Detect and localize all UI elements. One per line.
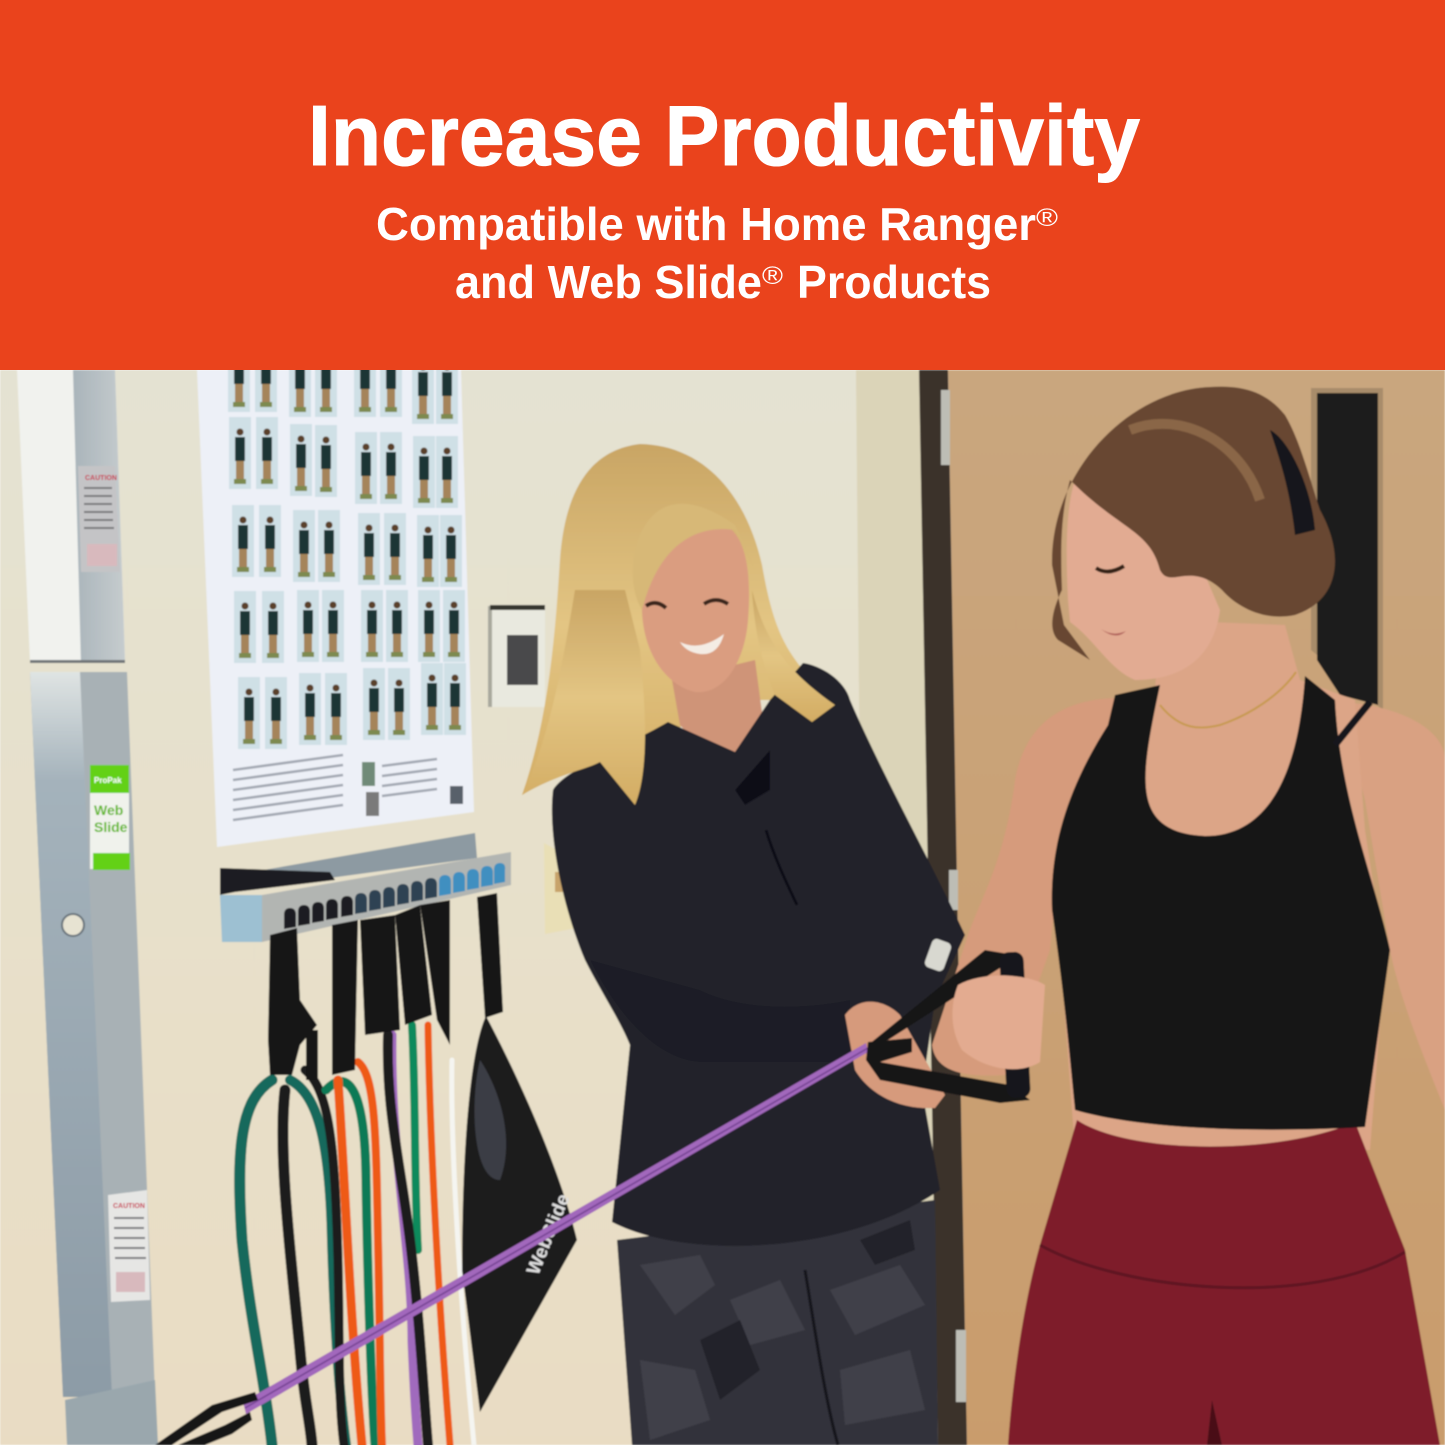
door frame <box>919 370 967 1445</box>
necklace <box>1160 672 1296 728</box>
door <box>948 370 1445 1445</box>
hanging resistance tubes <box>240 1025 474 1445</box>
Web Slide label: Slide <box>94 819 128 835</box>
neck <box>672 660 763 753</box>
caution label: CAUTION <box>85 475 117 482</box>
client <box>932 387 1445 1445</box>
subtitle: Compatible with Home Ranger <box>376 198 1036 250</box>
storage bag: WebSlide <box>523 1191 575 1278</box>
left arm and shoulder <box>932 698 1115 1076</box>
hair clip <box>1270 430 1315 535</box>
title: Increase Productivity <box>308 89 1140 184</box>
thermostat <box>488 605 545 707</box>
right arm <box>1356 704 1445 1108</box>
subtitle: Products <box>797 256 991 308</box>
torso and neck skin <box>1050 620 1385 1150</box>
brown hair <box>1052 387 1335 660</box>
camouflage leggings <box>617 1200 938 1445</box>
face <box>1067 480 1220 680</box>
instructor sleeve <box>590 960 852 1062</box>
door window <box>1311 388 1383 710</box>
Web Slide label: ProPak <box>94 776 122 785</box>
subtitle: ® <box>762 262 784 290</box>
leggings <box>1008 1120 1440 1445</box>
tubing rack <box>220 833 511 942</box>
upper wall rail <box>17 370 125 663</box>
caution label <box>78 466 120 572</box>
black zip top <box>552 663 965 1246</box>
Web Slide label: Web <box>94 802 123 818</box>
black tube straps <box>268 900 450 1080</box>
door hinges <box>941 390 966 1402</box>
purple resistance band <box>155 1043 868 1445</box>
exercise poster <box>197 340 474 847</box>
client hand over grip <box>952 976 1045 1069</box>
photo scene <box>0 340 1445 1445</box>
black grip <box>999 951 1031 1099</box>
handle straps <box>866 950 1045 1103</box>
bottom wall rail <box>65 1380 158 1445</box>
eyes and smile <box>646 600 728 654</box>
light switch plate <box>544 844 574 934</box>
instructor hand <box>845 1002 945 1108</box>
eye and lips <box>1096 566 1126 636</box>
lower wall rail <box>30 672 155 1397</box>
caution label lower: CAUTION <box>113 1203 145 1210</box>
subtitle: and Web Slide <box>455 256 762 308</box>
blonde hair front <box>522 590 835 805</box>
wall corner column <box>856 370 935 1202</box>
instructor <box>522 444 965 1445</box>
subtitle <box>376 198 1059 308</box>
face <box>642 525 749 692</box>
caution label lower <box>108 1190 150 1302</box>
black crop top <box>1052 676 1390 1130</box>
header panel <box>0 0 1445 370</box>
hair over forehead <box>638 524 731 607</box>
handle clip at wall <box>155 1392 258 1445</box>
wall background <box>0 370 920 1445</box>
Web Slide label <box>90 765 130 870</box>
storage bag <box>462 893 577 1412</box>
blonde hair back <box>522 444 835 805</box>
subtitle: ® <box>1036 204 1059 232</box>
